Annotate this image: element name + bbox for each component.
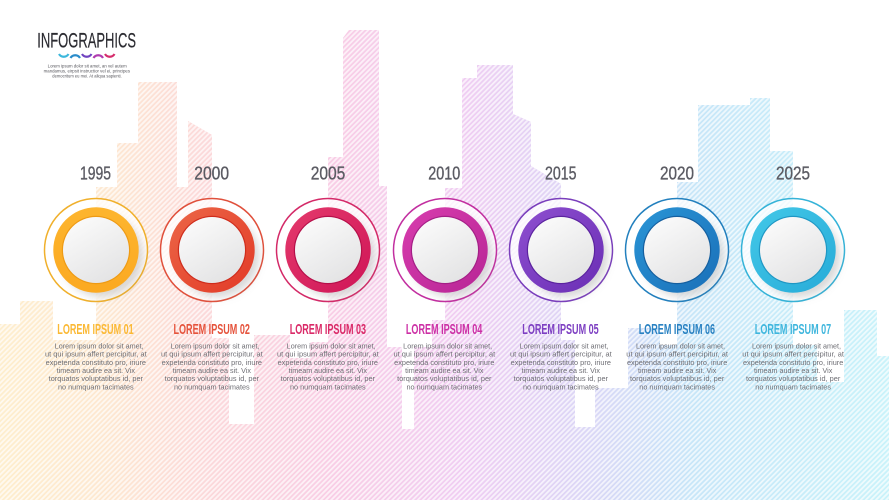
- text block 7: [742, 342, 844, 391]
- year 2010: 2010: [428, 162, 460, 184]
- text block 6: [626, 342, 728, 391]
- icon: circle 3: [276, 198, 380, 302]
- text block 7: ut qui ipsum affert percipitur, at: [742, 351, 844, 359]
- icon: wave decoration: [59, 54, 114, 58]
- step 1: 1995: [44, 162, 148, 391]
- text block 6: no numquam tacimates: [639, 383, 715, 391]
- text block 3: expetenda constituto pro, iriure: [278, 359, 378, 367]
- text block 1: no numquam tacimates: [58, 383, 134, 391]
- text block 5: no numquam tacimates: [523, 383, 599, 391]
- text block 5: timeam audire ea sit. Vix: [522, 367, 600, 375]
- text block 1: timeam audire ea sit. Vix: [57, 367, 135, 375]
- text block 7: Lorem ipsum dolor sit amet,: [752, 342, 841, 350]
- text block 3: timeam audire ea sit. Vix: [289, 367, 367, 375]
- text block 4: [394, 342, 495, 391]
- text block 6: timeam audire ea sit. Vix: [638, 367, 717, 375]
- title description: Lorem ipsum dolor sit amet, an vel autem: [48, 64, 127, 68]
- step 2: 2000: [160, 162, 264, 391]
- text block 7: expetenda constituto pro, iriure: [743, 359, 843, 367]
- title description: mandamus, eirpsit instructior vel ei, principes: [44, 68, 130, 74]
- text block 1: Lorem ipsum dolor sit amet,: [55, 342, 144, 350]
- icon: circle 5: [510, 198, 612, 302]
- title block: [37, 29, 136, 78]
- icon: circle 6: [626, 198, 728, 302]
- text block 3: Lorem ipsum dolor sit amet,: [287, 342, 376, 350]
- text block 5: [510, 342, 612, 391]
- text block 7: no numquam tacimates: [755, 383, 831, 391]
- text block 1: ut qui ipsum affert percipitur, at: [45, 351, 147, 359]
- heading 1: LOREM IPSUM 01: [57, 321, 134, 338]
- heading 5: LOREM IPSUM 05: [522, 321, 599, 338]
- text block 7: torquatos voluptatibus id, per: [746, 375, 841, 383]
- step 3: 2005: [276, 162, 380, 391]
- heading 7: LOREM IPSUM 07: [755, 321, 831, 338]
- text block 2: no numquam tacimates: [174, 383, 250, 391]
- text block 4: timeam audire ea sit. Vix: [405, 367, 484, 375]
- text block 3: no numquam tacimates: [290, 383, 366, 391]
- icon: circle 2: [160, 198, 264, 302]
- year 2005: 2005: [311, 162, 345, 184]
- year 2025: 2025: [776, 162, 810, 184]
- title description: [44, 64, 130, 78]
- heading 3: LOREM IPSUM 03: [290, 321, 366, 338]
- text block 4: no numquam tacimates: [406, 383, 483, 391]
- heading 6: LOREM IPSUM 06: [639, 321, 715, 338]
- text block 6: torquatos voluptatibus id, per: [630, 375, 725, 383]
- text block 5: torquatos voluptatibus id, per: [514, 375, 609, 383]
- year 2020: 2020: [660, 162, 694, 184]
- text block 5: Lorem ipsum dolor sit amet,: [520, 342, 609, 350]
- year 2000: 2000: [194, 162, 229, 184]
- text block 1: torquatos voluptatibus id, per: [49, 375, 144, 383]
- text block 1: expetenda constituto pro, iriure: [46, 359, 146, 367]
- text block 6: ut qui ipsum affert percipitur, at: [626, 351, 728, 359]
- step 4: 2010: [394, 162, 496, 391]
- text block 3: ut qui ipsum affert percipitur, at: [277, 351, 379, 359]
- text block 4: expetenda constituto pro, iriure: [394, 359, 495, 367]
- title description: democritum eu mei. At aliqua sapienti.: [52, 74, 122, 78]
- text block 2: expetenda constituto pro, iriure: [162, 359, 262, 367]
- icon: circle 7: [742, 198, 844, 302]
- icon: circle 1: [44, 198, 148, 302]
- text block 6: Lorem ipsum dolor sit amet,: [636, 342, 725, 350]
- text block 2: torquatos voluptatibus id, per: [165, 375, 260, 383]
- title: INFOGRAPHICS: [37, 29, 136, 53]
- text block 2: ut qui ipsum affert percipitur, at: [161, 351, 263, 359]
- text block 2: timeam audire ea sit. Vix: [173, 367, 251, 375]
- text block 4: ut qui ipsum affert percipitur, at: [394, 351, 495, 359]
- step 6: 2020: [626, 162, 728, 391]
- heading 4: LOREM IPSUM 04: [406, 321, 483, 338]
- text block 4: Lorem ipsum dolor sit amet,: [403, 342, 492, 350]
- icon: circle 4: [394, 198, 496, 302]
- step 7: 2025: [742, 162, 844, 391]
- text block 4: torquatos voluptatibus id, per: [397, 375, 492, 383]
- heading 2: LOREM IPSUM 02: [174, 321, 250, 338]
- text block 5: expetenda constituto pro, iriure: [511, 359, 611, 367]
- year 2015: 2015: [545, 162, 576, 184]
- step 5: 2015: [510, 162, 612, 391]
- text block 5: ut qui ipsum affert percipitur, at: [510, 351, 612, 359]
- text block 3: torquatos voluptatibus id, per: [281, 375, 376, 383]
- text block 1: [45, 342, 147, 391]
- text block 2: [161, 342, 263, 391]
- text block 6: expetenda constituto pro, iriure: [627, 359, 727, 367]
- text block 3: [277, 342, 379, 391]
- text block 7: timeam audire ea sit. Vix: [754, 367, 833, 375]
- year 1995: 1995: [80, 162, 111, 184]
- text block 2: Lorem ipsum dolor sit amet,: [171, 342, 260, 350]
